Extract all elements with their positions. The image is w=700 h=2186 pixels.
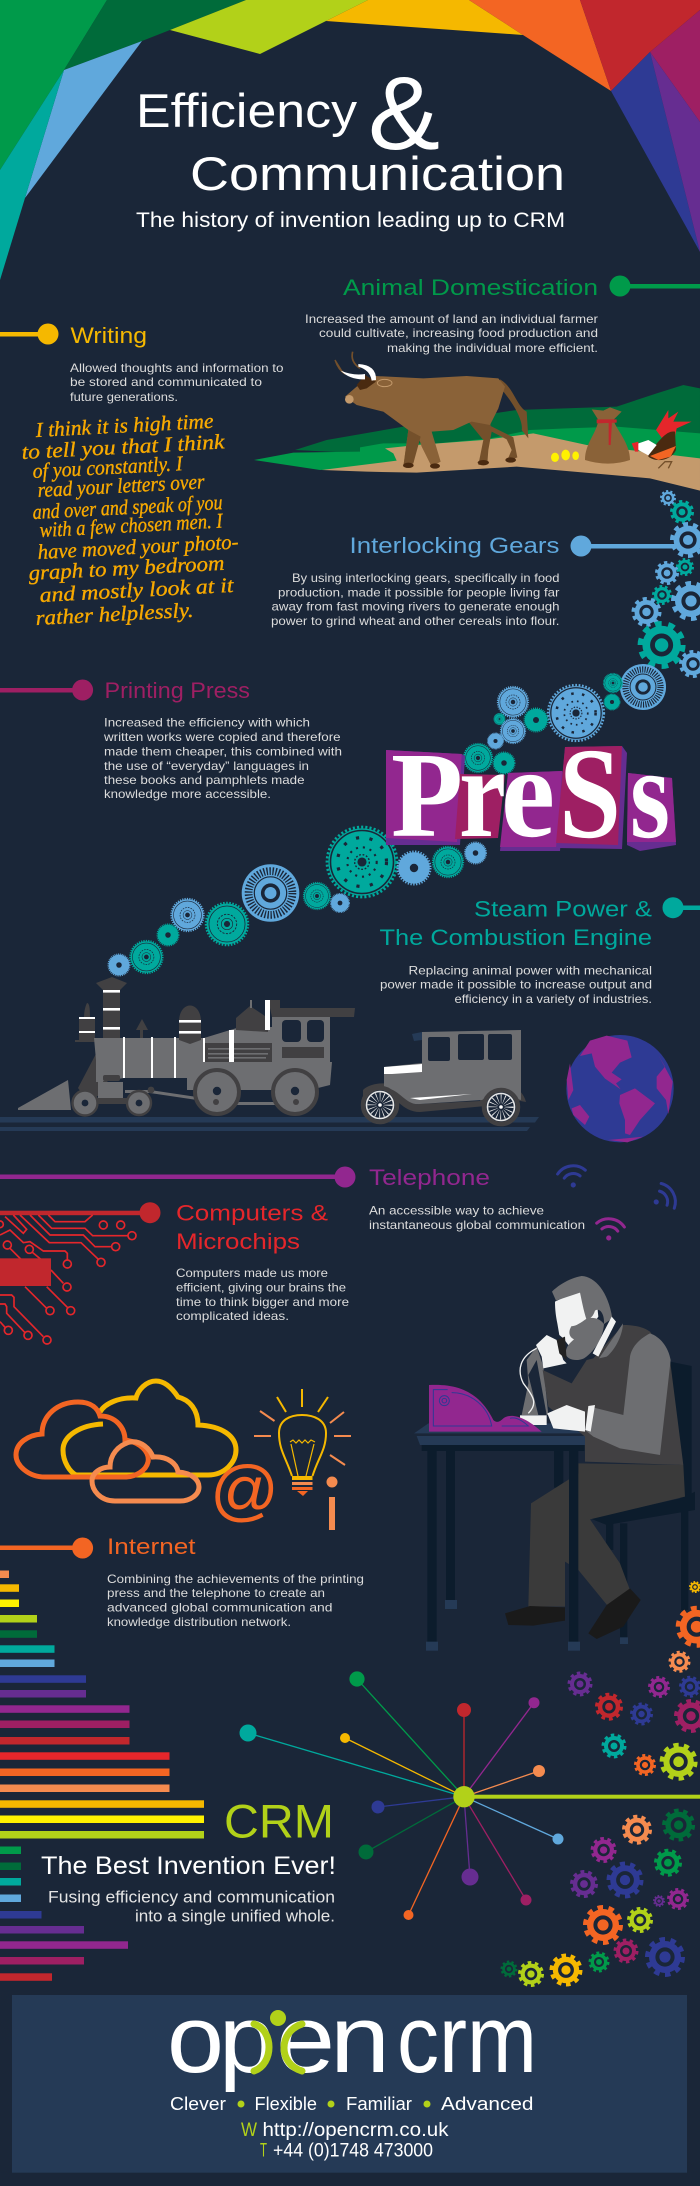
section: computers and microchips: Microchips — [176, 1229, 300, 1254]
contact details — [241, 2120, 449, 2162]
section: printing press: these books and pamphlets made — [104, 773, 305, 787]
section: steam power and combustion engine — [380, 897, 700, 1006]
rails — [0, 1117, 539, 1131]
handwritten letter: and over and speak of you — [32, 490, 223, 524]
section: steam power and combustion engine: Steam Power & — [474, 897, 652, 922]
chicks — [551, 450, 579, 462]
contact details: T — [260, 2141, 267, 2162]
press letter blocks — [386, 721, 676, 866]
section: printing press: the use of “everyday” languages in — [104, 759, 309, 773]
logo: open crm — [167, 1986, 537, 2093]
section: steam power and combustion engine: power made it possible to increase output and — [380, 978, 652, 992]
wifi signal icons — [557, 1164, 680, 1243]
head — [552, 1276, 616, 1360]
rooster — [632, 410, 692, 468]
section: telephone: An accessible way to achieve — [369, 1204, 544, 1218]
section: CRM: CRM — [224, 1795, 334, 1848]
press letter blocks: e — [501, 721, 555, 865]
section: printing press: made them cheaper, this combined with — [104, 745, 342, 759]
press letter blocks: S — [559, 722, 621, 866]
section: writing: future generations. — [70, 390, 178, 404]
section: telephone — [0, 1165, 585, 1232]
section: writing — [0, 323, 284, 404]
title — [136, 56, 565, 232]
top colour shards — [0, 0, 700, 280]
section: computers and microchips: Computers made us more — [176, 1266, 328, 1280]
section: computers and microchips: efficient, giving our brains the — [176, 1281, 346, 1295]
section: interlocking gears: By using interlocking gears, specifically in food — [292, 571, 560, 585]
handwritten letter: graph to my bedroom — [28, 551, 225, 585]
starburst network — [240, 1671, 700, 1920]
section: telephone: instantaneous global communication — [369, 1218, 585, 1232]
section: animal domestication: Increased the amount of land an individual farmer — [305, 312, 598, 326]
section: computers and microchips — [0, 1201, 349, 1323]
section: internet — [0, 1534, 364, 1629]
gear trail: steam from locomotive up to the right edge — [108, 491, 700, 976]
tagline: Advanced — [441, 2094, 534, 2114]
torso — [543, 1325, 683, 1465]
section: internet: knowledge distribution network. — [107, 1615, 291, 1629]
desk — [414, 1423, 592, 1651]
title: Communication — [190, 147, 565, 200]
section: CRM — [41, 1795, 336, 1926]
logo: open crm: p — [219, 1986, 275, 2093]
section: internet: Combining the achievements of the printing — [107, 1572, 364, 1586]
tagline — [170, 2094, 534, 2114]
globe — [566, 1035, 674, 1142]
section: interlocking gears: production, made it possible for people living far — [278, 586, 560, 600]
section: CRM: into a single unified whole. — [135, 1907, 335, 1926]
at sign: @ — [210, 1452, 279, 1528]
section: animal domestication: could cultivate, increasing food production and — [319, 326, 598, 340]
light bulb with rays — [254, 1389, 351, 1496]
section: computers and microchips: Computers & — [176, 1201, 328, 1226]
logo: open crm: crm — [397, 1986, 537, 2093]
logo: open crm: n — [330, 1986, 390, 2093]
handwritten letter: of you constantly. I — [32, 451, 184, 483]
section: printing press: written works were copied and therefore — [103, 730, 341, 744]
section: writing: Writing — [70, 323, 147, 348]
trousers and shoes — [505, 1463, 685, 1639]
handwritten letter: rather helplessly. — [35, 598, 194, 630]
section: writing: be stored and communicated to — [70, 375, 262, 389]
section: animal domestication: making the individual more efficient. — [387, 341, 598, 355]
section: computers and microchips: time to think bigger and more — [176, 1295, 349, 1309]
section: steam power and combustion engine: The Combustion Engine — [380, 925, 652, 950]
press letter blocks: r — [459, 721, 506, 865]
chair — [590, 1362, 695, 1644]
section: animal domestication: Animal Domestication — [343, 275, 598, 300]
illustration: farm with bull, sack, chicks and rooster — [254, 352, 700, 491]
section: writing: Allowed thoughts and information to — [70, 361, 284, 375]
letter i — [326, 1476, 338, 1530]
contact details: +44 (0)1748 473000 — [273, 2141, 433, 2162]
contact details: http://opencrm.co.uk — [262, 2120, 449, 2141]
section: internet: Internet — [107, 1534, 196, 1559]
section: steam power and combustion engine: efficiency in a variety of industries. — [454, 992, 652, 1006]
tagline: Familiar — [346, 2094, 412, 2114]
hands — [536, 1335, 595, 1432]
section: interlocking gears: power to grind wheat and other cereals into flour. — [271, 614, 560, 628]
title: The history of invention leading up to CRM — [136, 209, 565, 232]
section: internet: advanced global communication and — [107, 1600, 332, 1614]
bull — [335, 352, 528, 469]
section: internet: press and the telephone to create an — [107, 1586, 325, 1600]
footer panel — [12, 1986, 687, 2173]
logo: open crm: o — [167, 1986, 224, 2093]
section: interlocking gears — [271, 533, 675, 628]
section: printing press — [0, 678, 342, 801]
handwritten letter: and mostly look at it — [39, 573, 235, 607]
circuit board traces — [0, 1215, 136, 1344]
sack — [585, 407, 630, 464]
man on the telephone at a desk — [414, 1276, 695, 1651]
colourful gear cluster — [502, 1582, 700, 1985]
press letter blocks: s — [630, 722, 670, 866]
section: printing press: knowledge more accessible. — [104, 787, 271, 801]
title: & — [368, 56, 440, 172]
title: Efficiency — [136, 84, 358, 137]
press letter blocks: P — [391, 728, 463, 863]
telephone base and cord — [429, 1347, 548, 1432]
section: interlocking gears: Interlocking Gears — [350, 533, 560, 558]
clouds — [16, 1381, 236, 1501]
handwritten letter: I think it is high time — [34, 409, 214, 442]
section: telephone: Telephone — [369, 1165, 490, 1190]
section: animal domestication — [305, 275, 700, 355]
handwritten letter: have moved your photo- — [37, 530, 239, 564]
colour stacked bars — [0, 1570, 204, 1981]
section: CRM: The Best Invention Ever! — [41, 1852, 336, 1880]
tagline: Flexible — [254, 2094, 317, 2114]
section: printing press: Increased the efficiency with which — [104, 716, 310, 730]
tagline: Clever — [170, 2094, 226, 2114]
handwritten letter: with a few chosen men. I — [39, 508, 224, 542]
logo: open crm: e — [276, 1986, 335, 2093]
section: computers and microchips: complicated ideas. — [176, 1309, 289, 1323]
handwritten letter: to tell you that I think — [21, 429, 226, 464]
handwritten letter: read your letters over — [37, 469, 206, 502]
handwritten letter — [21, 409, 239, 630]
section: steam power and combustion engine: Replacing animal power with mechanical — [408, 964, 652, 978]
section: printing press: Printing Press — [104, 678, 250, 703]
section: interlocking gears: away from fast moving rivers to generate enough — [272, 600, 560, 614]
steam locomotive — [18, 977, 355, 1116]
section: CRM: Fusing efficiency and communication — [48, 1888, 335, 1907]
contact details: W — [241, 2120, 257, 2141]
vintage car — [363, 1030, 526, 1124]
